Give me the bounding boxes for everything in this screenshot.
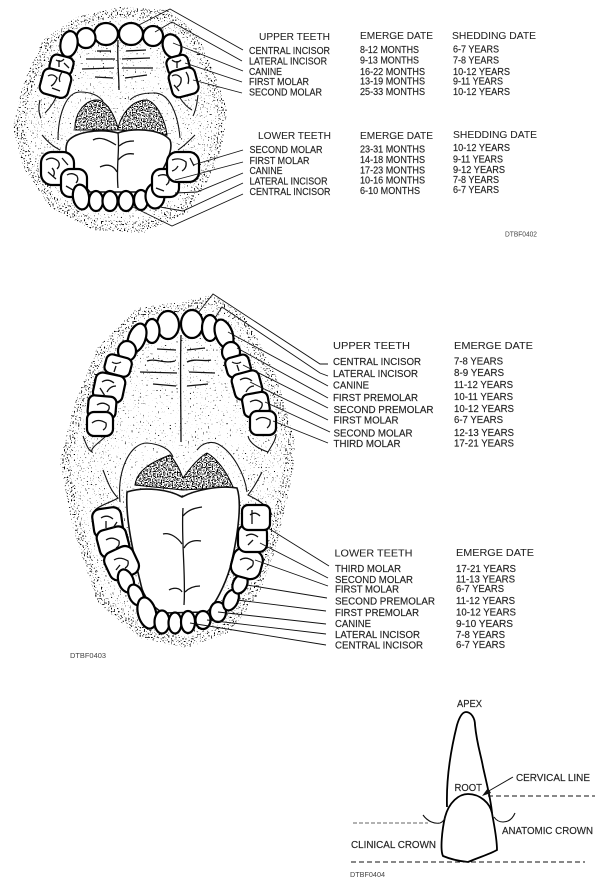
- palate folds and midline: [140, 335, 215, 442]
- emerge dates: 9-10 YEARS: [456, 619, 513, 630]
- table: permanent lower teeth: [334, 547, 534, 652]
- crown outline: [442, 794, 497, 862]
- figure code DTBF0404: DTBF0404: [350, 872, 385, 879]
- tongue creases: [93, 133, 134, 188]
- tooth names: SECOND MOLAR: [334, 428, 412, 440]
- arrow: cervical line: [482, 777, 513, 796]
- emerge dates: 25-33 MONTHS: [360, 87, 425, 98]
- tooth names: SECOND MOLAR: [249, 88, 322, 98]
- column headers: EMERGE DATE: [456, 547, 534, 559]
- tooth names: CENTRAL INCISOR: [333, 357, 421, 368]
- emerge dates: 13-19 MONTHS: [360, 76, 425, 88]
- tooth names: CANINE: [333, 380, 369, 392]
- lower teeth: [91, 505, 270, 634]
- throat: [135, 453, 233, 490]
- column headers: [258, 129, 537, 142]
- molar cusps: [92, 362, 270, 570]
- emerge dates: 23-31 MONTHS: [360, 144, 425, 156]
- emerge dates: 9-13 MONTHS: [360, 56, 419, 67]
- column headers: SHEDDING DATE: [453, 129, 537, 141]
- shedding dates: 10-12 YEARS: [453, 67, 510, 78]
- tooth names: SECOND PREMOLAR: [335, 596, 435, 608]
- column headers: [334, 547, 534, 560]
- leader lines: primary upper teeth: [137, 9, 243, 93]
- palate stipple: [112, 340, 250, 510]
- label: clinical crown: CLINICAL CROWN: [351, 840, 436, 851]
- root outline: [447, 712, 492, 813]
- emerge dates: [454, 356, 514, 450]
- molar cusps: [46, 59, 194, 191]
- label: apex: APEX: [457, 699, 482, 710]
- leader lines: permanent lower teeth: [190, 528, 329, 645]
- emerge dates: 6-7 YEARS: [456, 584, 504, 595]
- emerge dates: [456, 564, 516, 651]
- upper teeth: [87, 310, 276, 436]
- tooth names: FIRST PREMOLAR: [335, 608, 419, 619]
- column headers: UPPER TEETH: [259, 31, 330, 43]
- emerge dates: 14-18 MONTHS: [360, 155, 425, 166]
- tooth names: CANINE: [250, 166, 283, 177]
- tooth names: LATERAL INCISOR: [250, 176, 328, 188]
- emerge dates: 10-12 YEARS: [456, 608, 516, 618]
- tooth names: [333, 357, 434, 450]
- lower teeth: [41, 152, 199, 211]
- label: cervical line: CERVICAL LINE: [516, 773, 590, 784]
- tooth names: CENTRAL INCISOR: [335, 641, 423, 652]
- emerge dates: 17-21 YEARS: [454, 438, 514, 450]
- tooth names: LATERAL INCISOR: [333, 369, 418, 380]
- diagram: tooth anatomy: [351, 699, 595, 862]
- emerge dates: [360, 144, 425, 197]
- column headers: SHEDDING DATE: [452, 30, 536, 42]
- emerge dates: 8-12 MONTHS: [360, 45, 419, 56]
- shedding dates: 9-12 YEARS: [453, 165, 505, 176]
- tooth names: SECOND PREMOLAR: [334, 405, 434, 416]
- shedding dates: 9-11 YEARS: [453, 154, 503, 166]
- table: permanent upper teeth: [333, 340, 533, 450]
- throat: [75, 100, 167, 135]
- shedding dates: 7-8 YEARS: [453, 175, 499, 186]
- emerge dates: 8-9 YEARS: [454, 368, 504, 379]
- tooth names: [335, 564, 435, 652]
- tooth names: FIRST PREMOLAR: [333, 393, 418, 404]
- cervical line reference dashes: [488, 795, 595, 797]
- palate stipple: [60, 48, 178, 150]
- shedding dates: 7-8 YEARS: [453, 56, 499, 66]
- shedding dates: [453, 44, 510, 98]
- label: anatomic crown: ANATOMIC CROWN: [502, 826, 593, 837]
- emerge dates: 11-13 YEARS: [456, 574, 515, 586]
- tooth names: CANINE: [335, 619, 371, 630]
- tongue: [127, 487, 239, 613]
- leader lines: permanent upper teeth: [198, 294, 330, 443]
- shedding dates: 9-11 YEARS: [453, 76, 503, 88]
- emerge dates: 6-10 MONTHS: [360, 186, 420, 197]
- gum stipple: outer band: [13, 7, 227, 233]
- palatal arches: [83, 434, 276, 515]
- table: primary lower teeth: [250, 129, 537, 198]
- palatal arches: [39, 92, 198, 150]
- tooth names: FIRST MOLAR: [334, 416, 398, 426]
- tooth names: SECOND MOLAR: [335, 575, 413, 586]
- emerge dates: 17-23 MONTHS: [360, 166, 425, 176]
- baseline dashes: [351, 861, 585, 863]
- tooth names: [250, 145, 330, 198]
- tooth names: FIRST MOLAR: [335, 584, 399, 596]
- tooth names: THIRD MOLAR: [334, 439, 400, 450]
- tongue creases: [163, 507, 202, 605]
- shedding dates: 10-12 YEARS: [453, 143, 510, 154]
- figure code DTBF0403: DTBF0403: [70, 653, 106, 660]
- diagram: primary teeth mouth: [13, 7, 227, 233]
- palate folds and midline: [82, 40, 153, 90]
- figure code DTBF0402: DTBF0402: [505, 232, 537, 239]
- tooth names: [249, 46, 330, 98]
- tooth names: FIRST MOLAR: [250, 156, 310, 167]
- gum stipple: outer band: [60, 295, 295, 648]
- emerge dates: 7-8 YEARS: [454, 356, 503, 368]
- emerge dates: 16-22 MONTHS: [360, 67, 425, 78]
- leader lines: primary lower teeth: [133, 150, 243, 226]
- column headers: LOWER TEETH: [258, 130, 331, 142]
- emerge dates: 11-12 YEARS: [456, 596, 515, 607]
- column headers: EMERGE DATE: [360, 130, 433, 142]
- shedding dates: 10-12 YEARS: [453, 87, 510, 98]
- column headers: UPPER TEETH: [333, 340, 410, 352]
- column headers: [259, 30, 536, 43]
- emerge dates: 10-12 YEARS: [454, 404, 514, 415]
- emerge dates: 11-12 YEARS: [454, 380, 513, 391]
- gum stipple: inner area: [24, 17, 217, 222]
- tongue: [66, 130, 171, 192]
- emerge dates: 12-13 YEARS: [454, 428, 514, 439]
- tooth names: LATERAL INCISOR: [249, 56, 327, 68]
- emerge dates: 6-7 YEARS: [456, 640, 505, 651]
- tooth names: CENTRAL INCISOR: [250, 187, 330, 198]
- emerge dates: 10-11 YEARS: [454, 392, 513, 403]
- tooth names: LATERAL INCISOR: [335, 630, 420, 641]
- emerge dates: 10-16 MONTHS: [360, 176, 425, 186]
- tooth names: FIRST MOLAR: [249, 77, 309, 88]
- upper teeth: [38, 23, 200, 99]
- emerge dates: 17-21 YEARS: [456, 564, 516, 575]
- shedding dates: [453, 143, 510, 196]
- clinical crown upper dashes: [353, 822, 428, 824]
- column headers: [333, 340, 533, 352]
- shedding dates: 6-7 YEARS: [453, 185, 499, 196]
- gum line left: [423, 815, 446, 823]
- shedding dates: 6-7 YEARS: [453, 44, 499, 56]
- emerge dates: [360, 45, 425, 98]
- emerge dates: 6-7 YEARS: [454, 415, 503, 426]
- diagram: permanent teeth mouth: [60, 295, 295, 648]
- emerge dates: 7-8 YEARS: [456, 630, 505, 641]
- label: root: ROOT: [454, 783, 482, 794]
- gum stipple: inner area: [70, 305, 285, 638]
- tooth names: CENTRAL INCISOR: [249, 46, 330, 57]
- tooth names: THIRD MOLAR: [335, 564, 401, 575]
- column headers: EMERGE DATE: [454, 340, 533, 352]
- tooth names: CANINE: [249, 67, 282, 78]
- column headers: EMERGE DATE: [360, 30, 433, 42]
- column headers: LOWER TEETH: [334, 548, 412, 560]
- gum line right: [494, 813, 515, 822]
- table: primary upper teeth: [249, 30, 536, 98]
- tooth names: SECOND MOLAR: [250, 145, 322, 156]
